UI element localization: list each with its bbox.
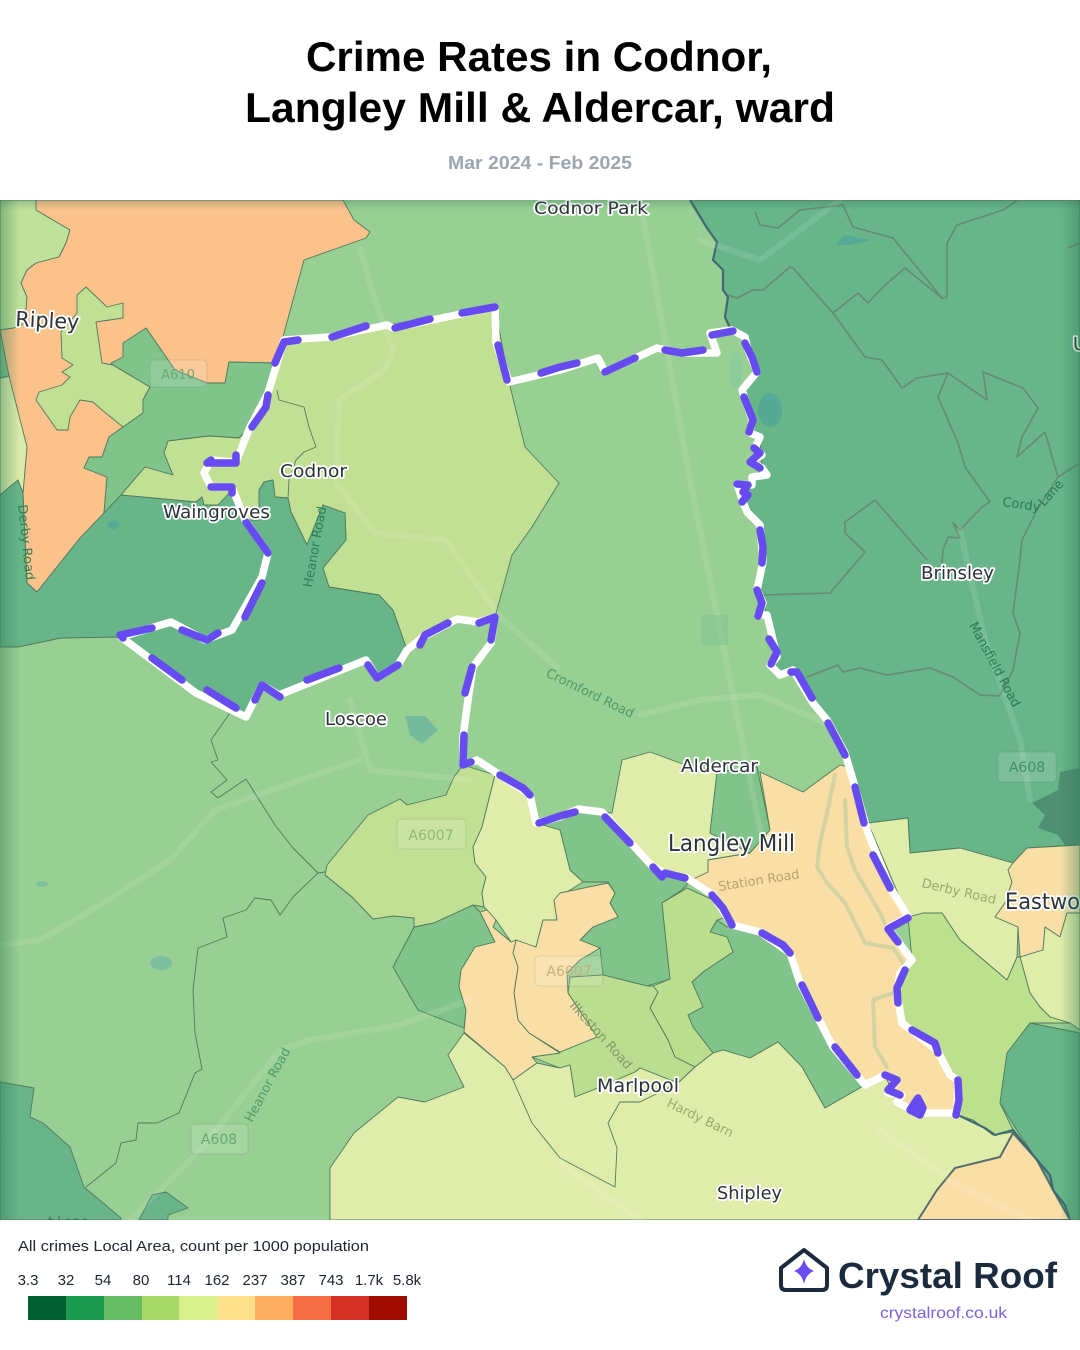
roads [0,200,1030,1220]
place labels: Shipley [717,1183,782,1204]
boundary lines east [728,200,1080,696]
legend value labels: 32 [58,1272,74,1289]
road labels [14,477,1067,1230]
road labels: Cromford Road [543,666,636,722]
area: east yellow [1020,913,1080,1030]
choropleth map [0,199,1080,1230]
area: A6007 light green [325,765,495,927]
area: Derby Road yellow [868,818,1018,980]
area: west edge strip [0,330,9,378]
area: mid green south of ward [688,920,865,1108]
area: Aldercar green [710,767,770,853]
legend title: All crimes Local Area, count per 1000 population [18,1238,369,1255]
legend value labels: 162 [204,1272,230,1289]
area: Aldercar yellow [602,752,750,882]
area: Eastwood peach [995,845,1080,957]
legend value labels: 54 [95,1272,111,1289]
area: north-west orange high crime [0,200,370,592]
road shields: A6007 [546,964,592,980]
area: Waingroves dark green [0,480,407,717]
road labels: Ilkeston Road [566,999,635,1073]
legend value labels: 80 [133,1272,149,1289]
line: Marlpool boundaries [513,1080,678,1187]
legend value labels: 5.8k [393,1272,422,1289]
area: south yellow Shipley [330,1033,1013,1220]
legend value labels [18,1272,422,1289]
road labels: Lane [1036,477,1067,510]
area: mid green north of Marlpool [536,809,687,986]
area: Codnor light green [121,307,559,650]
area: light green centre south [650,888,733,1067]
water features [36,235,870,970]
line: Codnor inner boundary [277,390,316,498]
area: Ripley light green [36,287,150,430]
area: Heanor peach west [459,910,560,1080]
place labels: Aldercar [681,756,759,777]
road labels: t Lane [48,1215,89,1230]
legend value labels: 3.3 [18,1272,38,1289]
website: crystalroof.co.uk [880,1305,1008,1322]
ward boundary: purple dashes [120,307,959,1115]
wordmark: Crystal Roof [838,1255,1058,1296]
road labels: Heanor Road [301,505,330,589]
place labels: Loscoe [325,709,387,730]
icon: house with star [781,1250,827,1290]
road shields [150,360,1056,1154]
title: Crime Rates in Codnor, [306,33,772,80]
title: Langley Mill & Aldercar, ward [245,84,835,131]
road labels: Station Road [717,867,801,895]
place labels: Marlpool [597,1075,679,1097]
road labels: Hardy Barn [664,1096,736,1141]
place labels [15,199,1080,1204]
area: Langley Mill peach ward section [687,765,958,1113]
place labels: Ripley [15,307,80,334]
legend colour scale [28,1296,407,1320]
place labels: Codnor [280,461,348,482]
area: small green near Loscoe south [393,905,495,1028]
legend value labels: 114 [167,1272,191,1289]
area: Erewash light green [897,913,1070,1135]
area: south-east dark green [1000,1023,1080,1220]
road labels: Mansfield Road [965,620,1023,710]
legend value labels: 743 [318,1272,344,1289]
area: east dark green [690,200,1080,863]
map edge shading [0,200,1080,1220]
area: west edge light [0,376,27,495]
boundary lines west [86,710,373,1187]
area: A610 mid green strip [84,328,275,513]
place labels: Langley Mill [668,831,795,857]
area: yellow west of ward [473,760,583,947]
area: small dark green patch [139,1192,188,1220]
road shields: A608 [1009,760,1045,776]
road shields: A6007 [408,828,454,844]
area: Heanor peach east [513,883,618,1052]
road labels: Derby Road [14,504,37,581]
area: top-left light green [0,200,70,330]
road labels: Derby Road [920,876,998,908]
area: darkest patch [1032,768,1080,845]
place labels: Waingroves [163,502,270,523]
canals in Langley Mill [817,775,903,1067]
river boundary north [690,200,730,328]
place labels: Brinsley [921,563,994,584]
ward boundary: white base [121,307,958,1113]
road shields: A610 [161,368,195,383]
legend [18,1238,422,1320]
title [245,33,835,131]
road shields: A608 [201,1132,237,1148]
legend value labels: 237 [242,1272,268,1289]
place labels: Codnor Park [534,199,648,219]
area: south-west dark green [0,1082,121,1220]
subtitle: date range: Mar 2024 - Feb 2025 [448,153,632,173]
legend value labels: 387 [280,1272,306,1289]
area: south-east peach [918,1133,1070,1220]
road labels: Heanor Road [242,1045,294,1125]
area: Marlpool light green [532,975,695,1097]
river boundary south-east [958,1115,1070,1220]
legend value labels: 1.7k [355,1272,384,1289]
road labels: Cordy [1001,495,1041,515]
logo: Crystal Roof [781,1250,1058,1322]
